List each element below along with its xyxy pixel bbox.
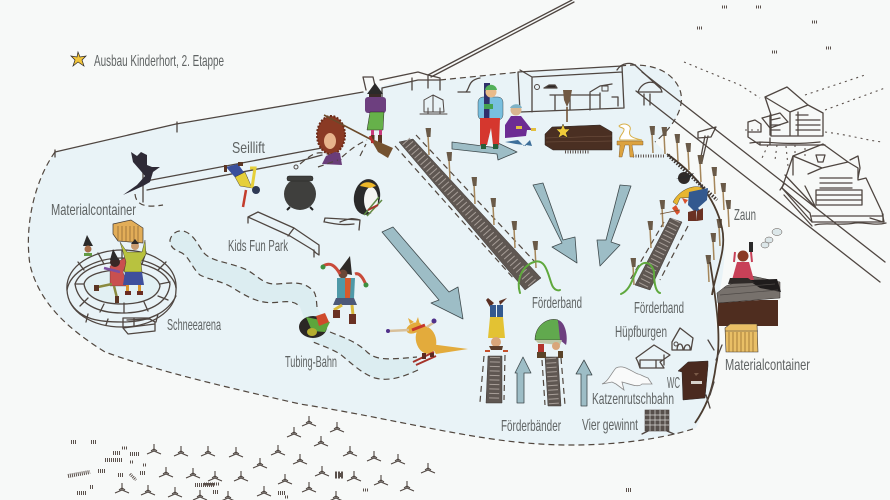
witch head with broom (317, 115, 393, 167)
lift station (363, 72, 480, 100)
kids fun park ramps (248, 212, 360, 257)
dotted paths top right (684, 62, 885, 166)
green snakes (519, 261, 660, 294)
chimney and smoke (749, 228, 782, 252)
digging child (660, 172, 708, 221)
label: Kids Fun Park: Kids Fun Park (228, 238, 289, 255)
child with green skirt (535, 319, 567, 358)
label: Förderband centre: Förderband (532, 295, 582, 312)
table with swan (617, 124, 643, 157)
label: Materialcontainer left: Materialcontainer (51, 202, 136, 219)
label: Materialcontainer right: Materialcontainer (725, 357, 810, 374)
title star icon (71, 52, 86, 66)
label: Förderbänder: Förderbänder (501, 418, 561, 435)
outhouse with roof (717, 276, 781, 326)
WC outhouse (678, 361, 708, 400)
labels (51, 140, 810, 435)
label: Seillift: Seillift (232, 140, 265, 157)
bird tracks (115, 416, 435, 500)
snow arena (67, 250, 176, 334)
labels: WC (667, 375, 680, 392)
skier with skis (478, 83, 503, 149)
tube rider (299, 313, 330, 338)
yellow material container (725, 324, 758, 352)
title: Ausbau Kinderhort, 2. Etappe (94, 53, 224, 70)
broom fence posts (426, 126, 731, 285)
houses top right (748, 87, 886, 226)
skier on lift (224, 162, 260, 207)
tracks top right (697, 7, 832, 52)
snow area (28, 65, 724, 445)
cat slide (602, 367, 652, 390)
label: Vier gewinnt: Vier gewinnt (582, 417, 638, 434)
connect four frame (642, 410, 674, 434)
girl on the roof (728, 250, 755, 284)
brown coffin (545, 124, 612, 150)
cauldron (284, 153, 342, 210)
material crate carried (113, 220, 143, 243)
children in arena (83, 235, 146, 303)
tunnel arch (617, 63, 662, 105)
label: Hüpfburgen: Hüpfburgen (615, 324, 667, 341)
upside-down child (485, 298, 508, 352)
lift cables (55, 0, 885, 282)
label: Förderband right: Förderband (634, 300, 684, 317)
foot smudges (68, 442, 632, 497)
main building (518, 66, 624, 112)
label: Tubing-Bahn: Tubing-Bahn (285, 354, 337, 371)
conveyor belts (395, 135, 688, 406)
label: Katzenrutschbahn: Katzenrutschbahn (592, 391, 674, 408)
label: Schneearena: Schneearena (167, 317, 221, 334)
dancing witch (320, 256, 368, 324)
lift pylon (698, 127, 716, 162)
broom in front of building (563, 90, 572, 122)
raven (123, 152, 160, 195)
label: Zaun: Zaun (734, 207, 756, 224)
hedge fence (565, 152, 723, 423)
tubing track (170, 231, 418, 379)
penguin (351, 177, 383, 217)
witch with hat (365, 83, 386, 143)
bouncy castles (636, 328, 693, 368)
house icon on the slope (420, 95, 447, 114)
sitting child (505, 104, 536, 146)
arrows (382, 142, 631, 406)
kangaroo skier (386, 317, 468, 365)
